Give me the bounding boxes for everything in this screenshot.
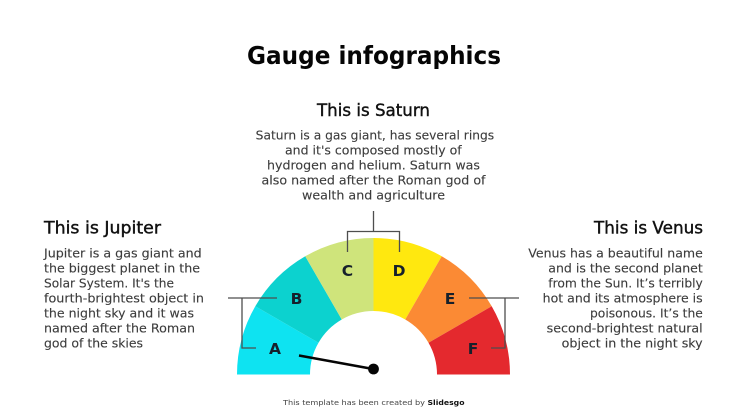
text block: Jupiter description: Solar System. It's the: [44, 276, 174, 290]
heading: This is Jupiter: This is Jupiter: [43, 218, 161, 237]
text block: Jupiter description: the night sky and it was: [44, 306, 194, 320]
text block: Venus description: and is the second planet: [548, 261, 703, 275]
label E: E: [445, 290, 455, 308]
text block: Jupiter description: Jupiter is a gas giant and: [43, 246, 202, 260]
title: Gauge infographics: [247, 41, 501, 70]
text block: Jupiter description: god of the skies: [44, 336, 143, 350]
panel: Jupiter: [43, 218, 204, 350]
label C: C: [342, 262, 353, 280]
text block: Venus description: hot and its atmosphere is: [543, 291, 703, 305]
label F: F: [468, 340, 478, 358]
text block: Saturn description: also named after the Roman god of: [262, 174, 486, 188]
text block: Saturn description: wealth and agriculture: [302, 188, 445, 202]
chart: gauge: [228, 211, 519, 374]
segment D: [374, 238, 442, 320]
text block: Saturn description: [256, 128, 494, 202]
text block: Venus description: [528, 246, 703, 350]
text block: Venus description: poisonous. It’s the: [590, 306, 703, 320]
heading: This is Saturn: This is Saturn: [316, 101, 430, 120]
text block: Venus description: from the Sun. It’s terribly: [548, 276, 703, 290]
heading: This is Venus: This is Venus: [593, 218, 703, 237]
text block: Venus description: object in the night sky: [562, 336, 703, 350]
footer credit: Slidesgo: [428, 398, 464, 407]
text block: Saturn description: and it's composed mostly of: [285, 144, 462, 158]
label A: A: [269, 340, 281, 358]
panel: Venus: [528, 218, 703, 350]
segment C: [305, 238, 374, 320]
footer credit: This template has been created by: [282, 398, 426, 407]
panel: Saturn: [256, 101, 494, 202]
connector: Saturn to C and D: [348, 211, 400, 252]
gauge needle: [299, 356, 379, 374]
text block: Jupiter description: the biggest planet in the: [44, 261, 200, 275]
text block: Jupiter description: named after the Roman: [44, 321, 195, 335]
text block: Venus description: second-brightest natural: [547, 321, 703, 335]
text block: Jupiter description: [43, 246, 204, 350]
connector: Jupiter to A and B: [228, 298, 277, 348]
segment E: [405, 256, 492, 343]
segment B: [255, 256, 342, 343]
label B: B: [291, 290, 302, 308]
segment F: [428, 306, 510, 374]
label D: D: [393, 262, 406, 280]
segment A: [237, 306, 318, 374]
text block: Venus description: Venus has a beautiful name: [528, 246, 703, 260]
text block: Saturn description: Saturn is a gas giant, has several rings: [256, 128, 494, 142]
text block: Saturn description: hydrogen and helium. Saturn was: [267, 158, 480, 172]
text block: Jupiter description: fourth-brightest object in: [44, 291, 204, 305]
connector: Venus to E and F: [469, 298, 519, 348]
